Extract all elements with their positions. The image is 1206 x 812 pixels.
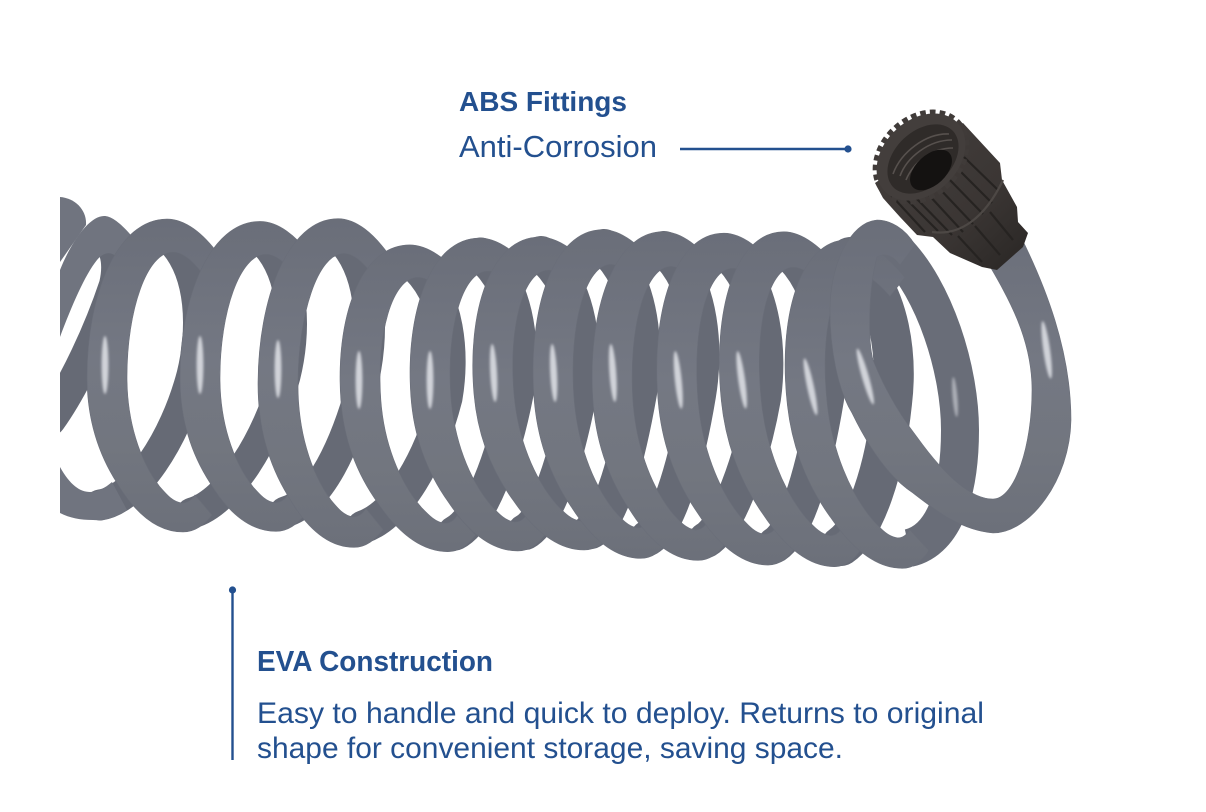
final large coil turn joining the fitting — [830, 220, 1071, 533]
callout: EVA Construction — [229, 586, 992, 765]
text: description: shape for convenient storage, saving space. — [257, 732, 843, 765]
front arcs of the coil turns — [87, 219, 938, 568]
partial coil turns at left edge — [60, 197, 135, 520]
icon: ABS threaded fitting — [859, 95, 1028, 270]
text: description: Easy to handle and quick to deploy. Returns to original — [257, 697, 984, 730]
fitting body — [875, 123, 1028, 270]
infographic canvas — [60, 91, 1072, 764]
fitting threads — [893, 134, 953, 180]
heading: ABS Fittings: ABS Fittings — [459, 86, 627, 117]
leader line to the hose — [229, 586, 236, 760]
highlights on the hose — [102, 321, 1054, 416]
heading: EVA Construction: EVA Construction — [257, 646, 493, 678]
text: Anti-Corrosion: Anti-Corrosion — [459, 129, 657, 164]
callout: ABS Fittings — [459, 86, 852, 164]
hose coil illustration — [50, 197, 1071, 568]
fitting ribs — [891, 157, 1013, 262]
leader line to the fitting — [680, 145, 852, 153]
rear strands of the coil — [50, 236, 960, 548]
fitting knurled face — [859, 95, 983, 219]
